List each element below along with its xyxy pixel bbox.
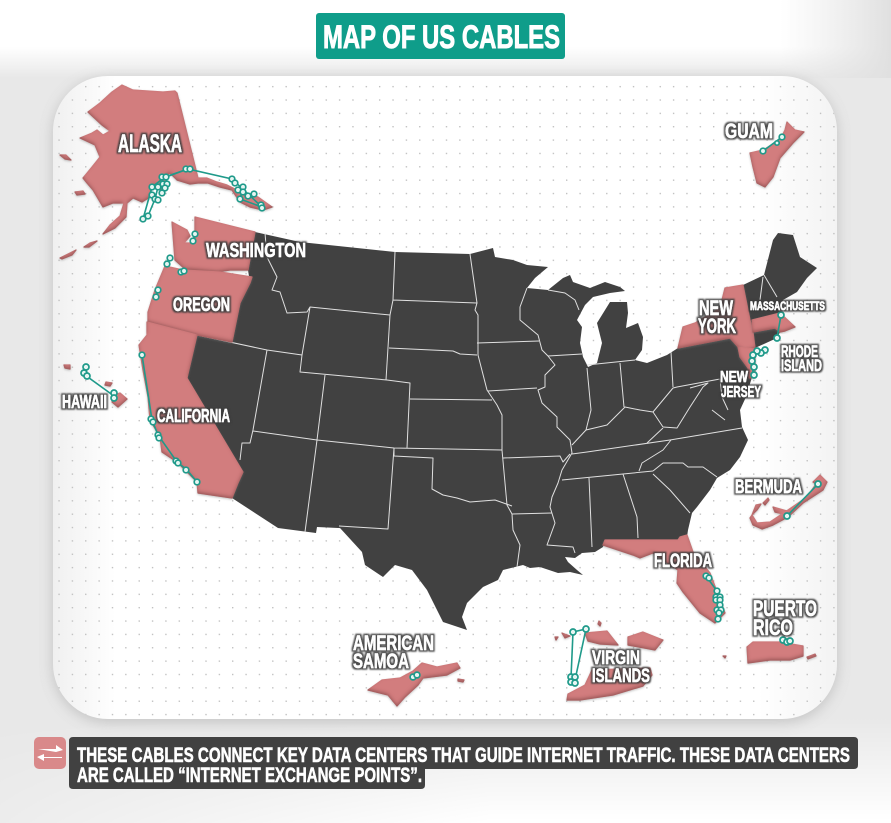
label: Rhode Island: ISLAND — [781, 356, 822, 375]
map: contiguous United States — [187, 232, 817, 630]
state borders — [197, 233, 777, 567]
cable: Puerto Rico — [780, 637, 793, 645]
title: MAP OF US CABLES — [323, 19, 560, 55]
territory: Guam — [750, 122, 804, 187]
cable: Hawaii — [81, 364, 117, 401]
state: Washington — [172, 217, 255, 272]
label: New York — [698, 297, 736, 338]
state: California — [139, 322, 243, 498]
territory: Bermuda — [750, 475, 827, 529]
label: Puerto Rico: PUERTO — [753, 596, 817, 621]
state: Alaska — [60, 85, 272, 259]
label: American Samoa — [353, 632, 434, 673]
territory: Hawaii — [64, 365, 127, 407]
label: Massachusetts: MASSACHUSETTS — [750, 299, 825, 313]
cable: Florida — [703, 573, 724, 622]
label: Oregon: OREGON — [173, 295, 230, 316]
label: Washington: WASHINGTON — [206, 240, 306, 262]
cable: Northeast — [749, 312, 784, 378]
cable: Bermuda — [784, 481, 821, 519]
cable: Alaska — [140, 166, 265, 222]
label: Virgin Islands: ISLANDS — [592, 666, 650, 687]
cable: Pacific Northwest — [153, 231, 198, 300]
label: Florida: FLORIDA — [654, 551, 712, 572]
label: California: CALIFORNIA — [157, 406, 230, 426]
label: American Samoa: SAMOA — [353, 650, 409, 673]
territory: Virgin Islands — [555, 621, 663, 700]
label: Puerto Rico: RICO — [753, 615, 793, 640]
state: New Jersey — [738, 347, 755, 378]
cable: California — [139, 352, 200, 485]
label: Virgin Islands: VIRGIN — [592, 648, 640, 669]
label: Bermuda: BERMUDA — [735, 477, 802, 498]
label: New Jersey: JERSEY — [721, 384, 761, 401]
label: New Jersey: NEW — [720, 369, 749, 386]
label: Rhode Island: RHODE — [781, 342, 818, 361]
cable: Virgin Islands — [568, 626, 589, 686]
icon: exchange arrows — [34, 737, 66, 769]
cable: American Samoa — [410, 672, 420, 680]
cables and nodes — [81, 134, 821, 686]
state: Massachusetts — [752, 313, 795, 332]
label: Guam: GUAM — [725, 120, 773, 143]
state: Florida — [603, 535, 725, 623]
state: Oregon — [148, 266, 252, 342]
label: Rhode Island — [781, 342, 822, 375]
territory: American Samoa — [368, 663, 464, 706]
label: Virgin Islands — [592, 648, 650, 687]
label: Alaska: ALASKA — [118, 130, 182, 158]
label: New York: YORK — [698, 315, 736, 338]
label: New York: NEW — [699, 297, 733, 320]
label: Hawaii: HAWAII — [62, 392, 107, 412]
label: American Samoa: AMERICAN — [353, 632, 434, 655]
title — [316, 13, 565, 59]
label: Puerto Rico — [753, 596, 817, 640]
label: New Jersey — [720, 369, 761, 401]
territory: Puerto Rico — [723, 642, 816, 663]
state: New York — [678, 285, 755, 352]
map labels — [62, 120, 825, 687]
cable: Guam — [760, 134, 785, 154]
callout: internet exchange points: ARE CALLED “INTERNET EXCHANGE POINTS”. — [77, 764, 422, 787]
panel: map — [53, 76, 837, 722]
callout: internet exchange points — [69, 737, 858, 789]
